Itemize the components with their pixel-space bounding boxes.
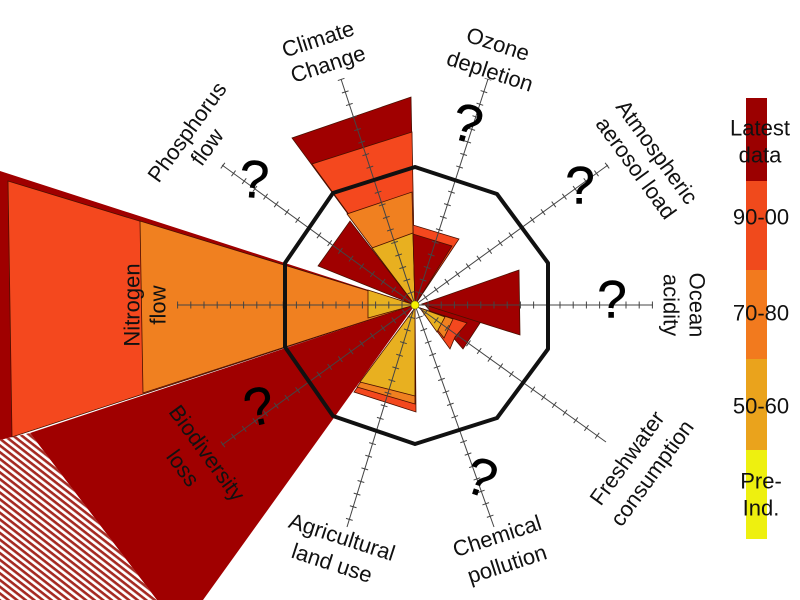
label: Ozone depletion <box>444 22 536 97</box>
legend: time scale: data <box>739 142 782 168</box>
legend: time scale: 70-80 <box>733 300 789 326</box>
unknown markers: question marks: ? <box>597 270 627 330</box>
label: Freshwater consumption: consumption <box>605 415 699 531</box>
label: Phosphorus flow: Phosphorus <box>142 77 232 187</box>
label: Ocean acidity: acidity <box>658 274 684 336</box>
safe boundary decagon <box>285 167 548 444</box>
legend: time scale: 50-60 <box>733 394 789 418</box>
wedge: agricultural land use <box>354 308 416 412</box>
unknown markers: question marks: ? <box>565 156 595 216</box>
wedge: ozone depletion <box>413 225 459 305</box>
label: Nitrogen flow <box>120 263 170 347</box>
unknown markers: question marks: ? <box>237 149 271 211</box>
label: Climate Change: Climate <box>279 16 357 62</box>
center point <box>411 301 419 309</box>
wedge: climate change <box>292 97 415 305</box>
legend: time scale: Latest <box>730 116 790 140</box>
label: Atmospheric aerosol load: Atmospheric <box>611 95 703 209</box>
label: Climate Change <box>279 16 369 88</box>
label: Ocean acidity: Ocean <box>684 273 710 337</box>
label: Ozone depletion: Ozone <box>463 22 533 66</box>
label: Ocean acidity <box>658 273 710 337</box>
legend: time scale <box>730 98 790 539</box>
label: Chemical pollution <box>450 510 550 589</box>
label: Ozone depletion: depletion <box>444 45 536 97</box>
label: Biodiversity loss: Biodiversity <box>164 400 250 506</box>
label: Biodiversity loss: loss <box>161 445 205 491</box>
hatched biodiversity overflow <box>0 433 157 600</box>
label: Atmospheric aerosol load: aerosol load <box>591 112 681 224</box>
label: Chemical pollution: Chemical <box>450 510 544 562</box>
legend: time scale: 90-00 <box>733 204 789 230</box>
label: Freshwater consumption: Freshwater <box>585 406 669 510</box>
unknown markers: question marks: ? <box>458 445 504 511</box>
wedge: freshwater consumption <box>420 305 482 349</box>
label: Agricultural land use: Agricultural <box>286 508 398 566</box>
axes with tick marks <box>177 79 653 527</box>
unknown markers: question marks: ? <box>238 375 280 439</box>
legend: time scale: Pre- <box>740 468 782 494</box>
label: Chemical pollution: pollution <box>464 539 550 589</box>
wedge: ocean acidity <box>422 270 520 335</box>
label: Phosphorus flow: flow <box>185 124 229 170</box>
label: Agricultural land use: land use <box>289 538 375 588</box>
label: Nitrogen flow: Nitrogen <box>120 263 144 347</box>
wedge: nitrogen flow <box>0 171 415 440</box>
unknown markers: question marks <box>237 92 627 511</box>
wedge: biodiversity loss <box>30 305 415 600</box>
legend: time scale: Ind. <box>743 496 779 520</box>
unknown markers: question marks: ? <box>445 92 489 156</box>
label: Climate Change: Change <box>287 40 369 88</box>
label: Nitrogen flow: flow <box>146 285 170 325</box>
wedge: phosphorus flow <box>318 221 415 305</box>
